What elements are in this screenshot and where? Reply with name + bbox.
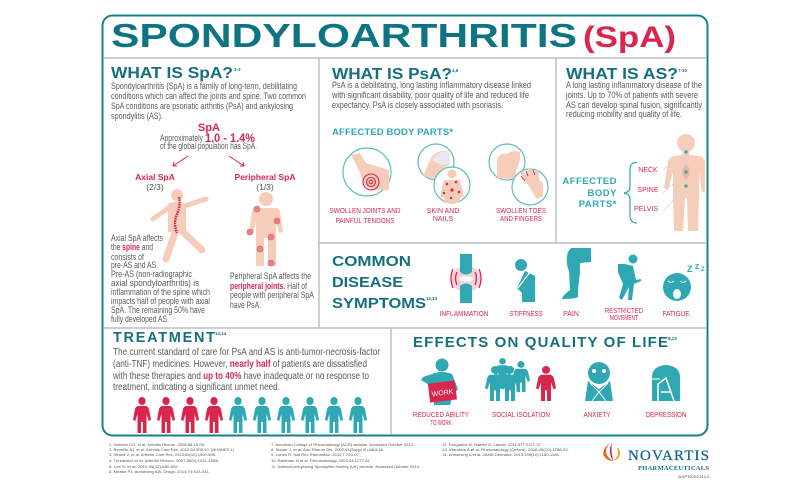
text block: PsA definition: with significant disability, poor quality of life and reduced life [331, 90, 529, 100]
references [109, 443, 569, 474]
heading: effects on quality of life: EFFECTS ON QUALITY OF LIFE [413, 334, 668, 351]
heading: common disease symptoms [332, 254, 438, 312]
text block: axial SpA: the spine and [111, 242, 153, 252]
label: fatigue: FATIGUE [662, 311, 690, 318]
references: 4. Turkiewicz et al. Arthritis Rheum. 2007;56(4):1051-1066. [109, 459, 219, 463]
text block: axial SpA: Axial SpA affects [111, 233, 163, 243]
text block: SpA definition: conditions which can affect the joints and spine. Two common [111, 91, 306, 101]
logo: Novartis: PHARMACEUTICALS [638, 465, 709, 472]
references: 11. National Ankylosing Spondylitis Society (UK) website. Accessed October 2014. [271, 465, 420, 469]
heading: axial SpA [135, 172, 175, 192]
text block: SpA definition: spondylitis (AS). [111, 111, 163, 121]
references: 5. Lee S, et al. 2010;35(12):680-692. [109, 465, 179, 469]
icon: reduced ability to work [421, 358, 458, 405]
text block: treatment: (anti-TNF) medicines. However, nearly half of patients are dissatisfied [113, 359, 367, 370]
icon: fatigue: Z [701, 267, 705, 273]
label: skin and nails [427, 208, 459, 223]
references: 1. Helmick CG, et al. Arthritis Rheum. 2008;58:15-25. [109, 443, 205, 447]
text block: axial SpA: consists of [111, 252, 144, 262]
references: 2. Reveille JD, et al. Arthritis Care Res. 2012;64:905-10. (NHANES 1) [109, 448, 235, 452]
label: skin and nails: SKIN AND [427, 208, 459, 215]
references: 8. Sieper J, et al. Ann Rheum Dis. 2002;61(Suppl III):iii8-iii18. [271, 448, 384, 452]
label: pain: PAIN [563, 311, 579, 318]
callout: prevalence: Approximately [160, 133, 203, 143]
heading: what is AS: 7-10 [678, 68, 688, 73]
heading: common disease symptoms: 12,13 [426, 296, 438, 301]
callout: prevalence: of the global population has SpA. [160, 141, 257, 151]
title: SPONDYLOARTHRITIS [111, 17, 577, 54]
text block: axial SpA: fully developed AS. [111, 314, 169, 324]
heading: effects on quality of life: 8,13 [668, 336, 677, 341]
logo: Novartis [603, 443, 709, 479]
text block: axial SpA: SpA. The remaining 50% have [111, 305, 205, 315]
label: swollen toes and fingers: SWOLLEN TOES [496, 208, 546, 215]
text block: peripheral SpA: people with peripheral SpA [230, 290, 314, 300]
icon: swollen toes [489, 144, 525, 180]
icon: fatigue [663, 264, 705, 301]
labels: neck spine pelvis [634, 167, 659, 213]
text block: axial SpA: pre-AS and AS. [111, 260, 158, 270]
references: 9. Lories R. Nat Rev Rheumatol. 2011;7:700-07. [271, 453, 360, 457]
callout: prevalence: SpA [198, 122, 220, 134]
text block: axial SpA: impacts half of people with axial [111, 296, 210, 306]
heading: common disease symptoms: SYMPTOMS [332, 296, 426, 312]
icon: pain [562, 248, 591, 299]
references: 12. Dougados M, Baeten D. Lancet. 2011;377:2127-37. [442, 443, 542, 447]
logo: Novartis: NOVARTIS [628, 448, 709, 464]
text block: peripheral SpA: have PsA. [230, 300, 261, 310]
title: (SpA) [583, 21, 676, 54]
arrow: to axial SpA [173, 156, 188, 166]
text block: treatment: treatment, indicating a significant unmet need. [113, 382, 280, 393]
label: restricted movement [605, 308, 643, 322]
references: 13. Wanders A et al. Rheumatology (Oxford). 2006;45(10):1288-93. [442, 448, 569, 452]
label: anxiety: ANXIETY [584, 412, 611, 419]
pictogram: ten patients [133, 397, 367, 433]
references: 14. Armstrong A et al. JAMA Dermatol. 2013;149(10):1180-1185. [442, 453, 560, 457]
icon: reduced ability to work: WORK [431, 389, 454, 398]
heading: axial SpA: (2/3) [146, 182, 164, 192]
text block: treatment [112, 347, 381, 393]
heading: common disease symptoms: COMMON [332, 254, 411, 270]
heading: what is PsA: 4,5 [452, 68, 459, 73]
heading: what is AS: WHAT IS AS? [566, 66, 678, 83]
heading: axial SpA: Axial SpA [135, 172, 175, 182]
label: social isolation: SOCIAL ISOLATION [492, 412, 550, 419]
heading: affected body parts: AFFECTED BODY PARTS* [332, 127, 453, 138]
heading: treatment: 13,14 [215, 331, 227, 336]
text block: AS definition [565, 80, 702, 119]
icon: stiffness [515, 259, 535, 302]
label: depression: DEPRESSION [646, 412, 686, 419]
text block: axial SpA [111, 233, 210, 324]
panel: effects on quality of life [413, 334, 686, 427]
label: stiffness: STIFFNESS [510, 311, 543, 318]
panel: what is AS [562, 66, 705, 231]
panel: what is SpA [111, 65, 314, 324]
text block: SpA definition: Spondyloarthritis (SpA) is a family of long-term, debilitating [111, 81, 297, 91]
arrow: to peripheral SpA [229, 156, 244, 166]
text block: AS definition: A long lasting inflammatory disease of the [566, 80, 702, 90]
callout: prevalence [160, 122, 257, 151]
frame [102, 16, 708, 436]
heading: affected body parts AS: AFFECTED [562, 176, 617, 187]
panel: treatment [112, 330, 381, 433]
label: swollen joints: PAINFUL TENDONS [336, 218, 395, 225]
icon: depression [652, 365, 680, 401]
text block: PsA definition [331, 80, 531, 110]
heading: peripheral SpA: Peripheral SpA [235, 172, 295, 182]
panel: what is PsA [330, 66, 548, 225]
label: restricted movement: RESTRICTED [605, 308, 643, 315]
icon: fatigue: Z [695, 264, 700, 271]
text block: axial SpA: axial spondyloarthritis) is [111, 278, 199, 288]
heading: peripheral SpA: (1/3) [256, 182, 274, 192]
label: swollen joints: SWOLLEN JOINTS AND [330, 208, 400, 215]
icon: AS body figure [663, 134, 705, 231]
callout: prevalence: 1.0 - 1.4% [205, 133, 255, 145]
text block: PsA definition: PsA is a debilitating, long lasting inflammatory disease linked [332, 80, 531, 90]
heading: what is SpA: 1-3 [234, 67, 241, 72]
references: 3. Strand V, et al. Arthritis Care Res. 2013;65(10):1590-598. [109, 453, 216, 457]
labels: neck spine pelvis: NECK [638, 167, 658, 174]
label: swollen joints [330, 208, 400, 225]
text block: AS definition: joints. Up to 70% of patients with severe [565, 90, 698, 100]
text block: treatment: with these therapies and up to 40% have inadequate or no response to [112, 371, 369, 382]
text block: peripheral SpA: peripheral joints. Half of [230, 281, 307, 291]
brace [624, 162, 637, 223]
icon: inflammation [451, 254, 481, 303]
heading: what is PsA: WHAT IS PsA? [332, 66, 452, 83]
text block: treatment: The current standard of care for PsA and AS is anti-tumor-necrosis-factor [113, 347, 381, 358]
icon: peripheral figure with joints [247, 192, 283, 266]
icon: axial figure with spine [153, 189, 206, 259]
text block: SpA definition [111, 81, 306, 121]
label: reduced ability to work: REDUCED ABILITY [413, 412, 469, 419]
text block: axial SpA: inflammation of the spine which [111, 287, 210, 297]
heading: affected body parts AS [562, 176, 617, 210]
references: 6. Mease PJ, Armstrong AW. Drugs. 2014;74:423-441. [109, 470, 210, 474]
label: swollen toes and fingers [496, 208, 546, 223]
heading: treatment: TREATMENT [113, 330, 215, 346]
text block: PsA definition: expectancy. PsA is closely associated with psoriasis. [332, 100, 503, 110]
text block: AS definition: reducing mobility and quality of life. [566, 109, 682, 119]
text block: axial SpA: Pre-AS (non-radiographic [111, 269, 192, 279]
references: 7. American College of Rheumatology (ACR) website. Accessed October 2014. [271, 443, 414, 447]
logo: Novartis: ASPR0021114 [678, 475, 709, 479]
icon: nail [418, 144, 454, 180]
text block: peripheral SpA: Peripheral SpA affects the [230, 271, 311, 281]
heading: what is SpA: WHAT IS SpA? [111, 65, 233, 82]
text block: SpA definition: SpA conditions are psoriatic arthritis (PsA) and ankylosing [111, 101, 293, 111]
icon: restricted movement [618, 254, 641, 300]
text block: peripheral SpA [230, 271, 314, 310]
heading: common disease symptoms: DISEASE [332, 275, 403, 291]
text block: AS definition: AS can develop spinal fusion, significantly [566, 100, 702, 110]
icon: social isolation [485, 358, 556, 401]
labels: neck spine pelvis: PELVIS [634, 206, 658, 213]
label: reduced ability to work [413, 412, 469, 427]
icon: swollen fingers [512, 168, 548, 205]
icon: fatigue: Z [687, 264, 693, 274]
heading: affected body parts AS: PARTS* [579, 199, 617, 210]
label: swollen toes and fingers: AND FINGERS [500, 216, 542, 223]
label: inflammation: INFLAMMATION [440, 311, 488, 318]
heading: affected body parts AS: BODY [588, 188, 617, 199]
panel: common disease symptoms [332, 248, 705, 322]
references: 10. Barkham N et al. Rheumatology. 2005;44:1277-81. [271, 459, 371, 463]
icon: swollen joint [343, 148, 391, 196]
label: skin and nails: NAILS [433, 216, 453, 223]
labels: neck spine pelvis: SPINE [637, 187, 659, 194]
icon: anxiety [585, 362, 613, 401]
label: reduced ability to work: TO WORK [430, 420, 452, 427]
icon: skin [434, 167, 470, 203]
title [111, 17, 676, 54]
label: restricted movement: MOVEMENT [610, 315, 638, 322]
heading: peripheral SpA [235, 172, 295, 192]
